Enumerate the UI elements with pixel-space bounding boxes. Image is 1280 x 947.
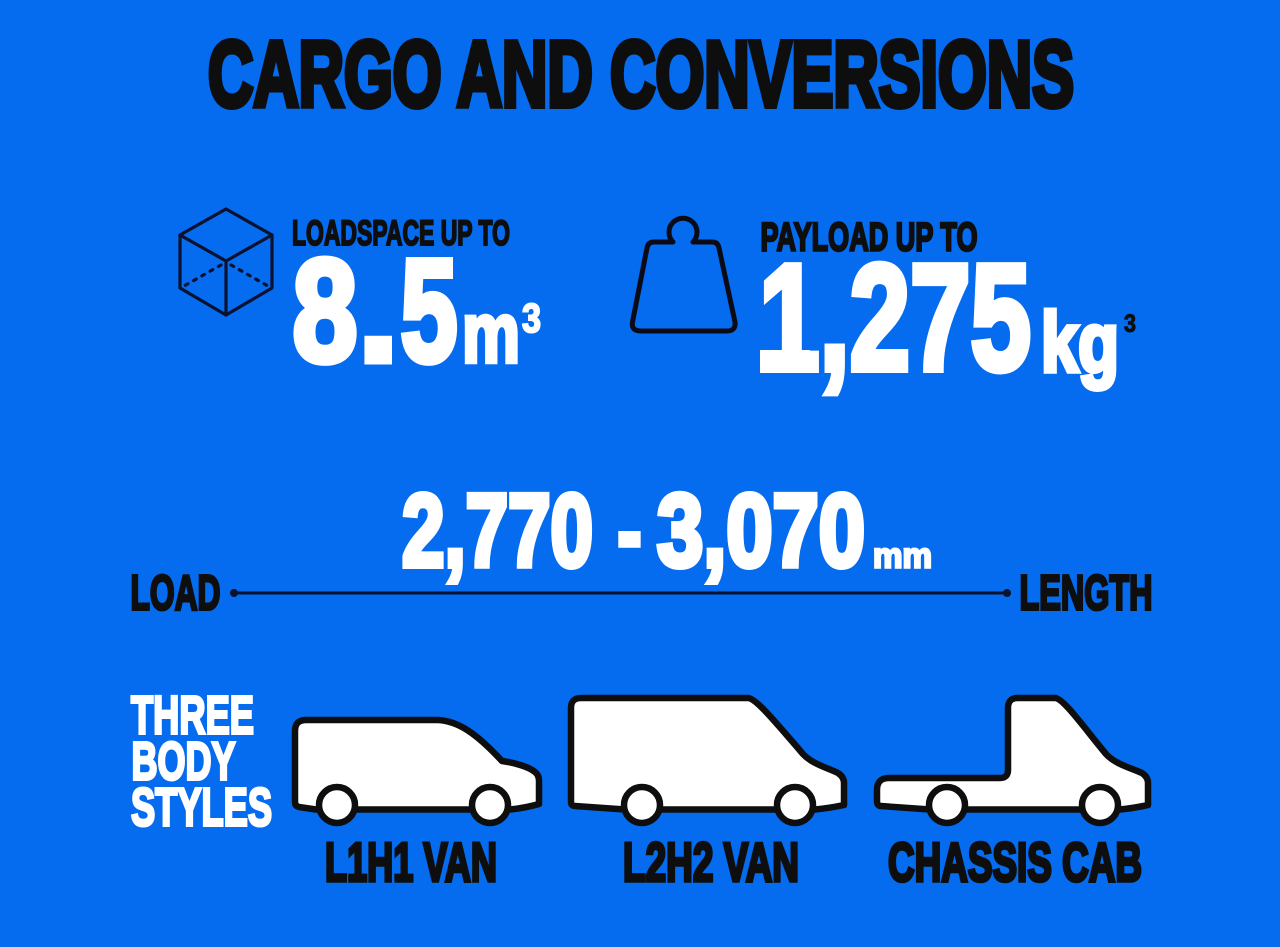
loadspace value [292,229,458,392]
icon: L1H1 van [295,720,539,823]
panel: load length [130,473,1152,620]
arrow: dimension line [230,589,1011,597]
loadspace value: 8 [292,229,358,392]
length label: LENGTH [1020,566,1152,620]
payload label: PAYLOAD UP TO [760,216,978,260]
L2H2 label: L2H2 VAN [623,832,799,893]
payload unit: kg [1041,296,1119,390]
loadspace superscript: 3 [522,295,541,341]
load label: LOAD [130,566,220,620]
body styles heading [131,686,272,838]
length unit: mm [873,536,932,576]
loadspace label: LOADSPACE UP TO [292,214,510,253]
loadspace unit: m [462,286,520,381]
length value [402,473,865,588]
length value: 2,770 [402,473,593,588]
payload value: 1,275 [759,232,1031,402]
body styles heading: BODY [132,732,236,792]
body styles heading: THREE [131,686,254,746]
icon: chassis cab [877,698,1148,823]
icon: cube [180,209,272,315]
panel: payload [632,216,1136,402]
body styles heading: STYLES [131,778,272,838]
length value: - [617,473,642,588]
length value: 3,070 [657,473,865,588]
panel: body styles [131,686,1148,893]
chassis cab label: CHASSIS CAB [888,832,1142,893]
loadspace value: . [358,229,399,392]
panel: loadspace [180,209,541,392]
loadspace value: 5 [400,229,458,392]
payload superscript: 3 [1124,310,1136,338]
icon: L2H2 van [571,698,844,823]
icon: weight [632,218,735,331]
L1H1 label: L1H1 VAN [325,832,497,893]
